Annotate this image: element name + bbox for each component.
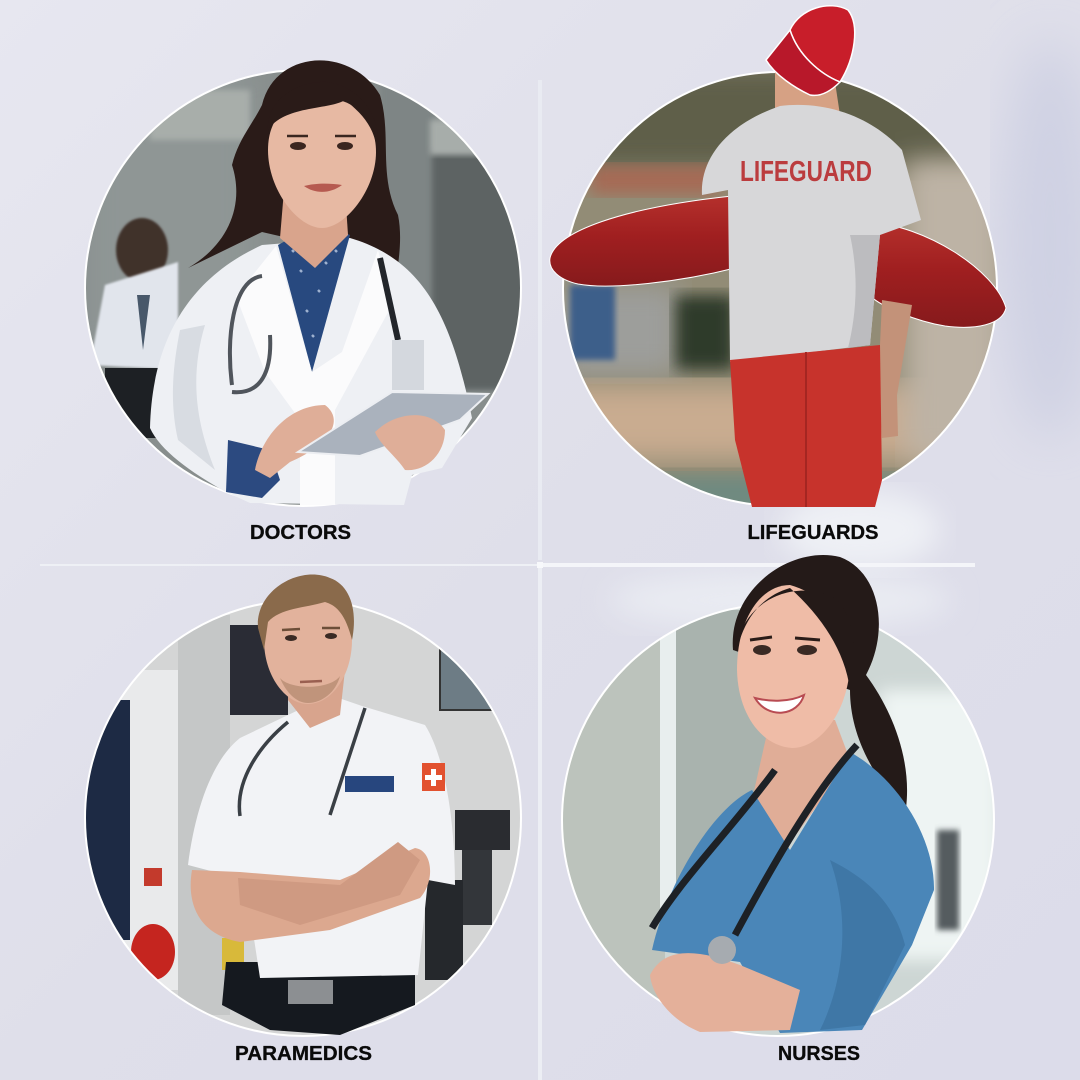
label: doctors: DOCTORS [250, 522, 351, 544]
doctors circle outline [85, 70, 521, 506]
nurses photo background [560, 604, 1000, 1036]
lifeguards circle outline [563, 72, 997, 506]
label: lifeguards: LIFEGUARDS [748, 522, 878, 544]
doctor figure [150, 60, 488, 505]
panel: lifeguards [550, 6, 1006, 544]
paramedic figure [188, 575, 455, 1035]
paramedics photo background [84, 600, 521, 1036]
shirt lettering: LIFEGUARD [740, 156, 872, 188]
label: nurses: NURSES [778, 1043, 860, 1065]
label: paramedics: PARAMEDICS [235, 1043, 372, 1065]
lifeguard figure [550, 6, 1006, 507]
doctor face [287, 136, 356, 192]
nurse figure [650, 555, 934, 1033]
nurse face [750, 637, 820, 713]
nurses circle outline [562, 604, 994, 1036]
panel: nurses [560, 555, 1000, 1065]
lifeguards photo background [555, 65, 1005, 515]
panel: paramedics [84, 575, 521, 1065]
doctors photo background [85, 70, 527, 506]
panel: doctors [85, 60, 527, 544]
paramedic face [280, 628, 340, 703]
paramedics circle outline [85, 600, 521, 1036]
